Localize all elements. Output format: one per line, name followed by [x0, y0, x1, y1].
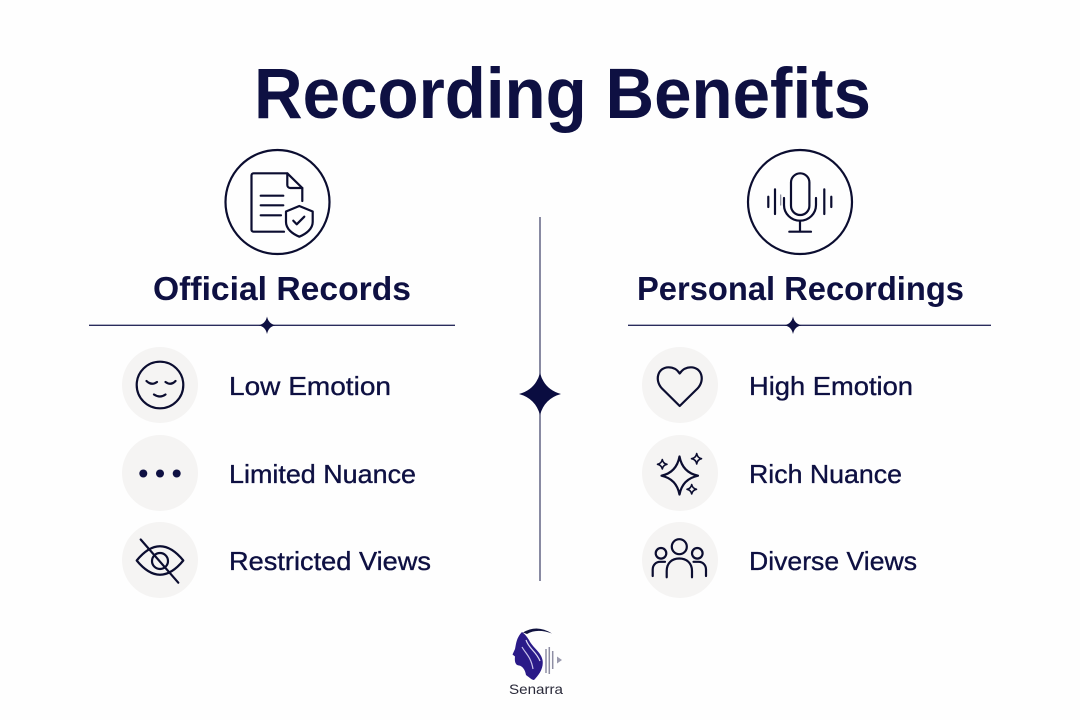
icon: sparkles	[658, 454, 702, 494]
divider: left	[89, 316, 455, 334]
row: high emotion	[642, 347, 913, 423]
row: limited nuance	[122, 435, 416, 511]
row: rich nuance: Rich Nuance	[749, 459, 902, 489]
row: restricted views: Restricted Views	[229, 546, 431, 576]
icon: three dots	[139, 470, 181, 478]
icon: calm face	[137, 362, 183, 408]
heading: official records: Official Records	[153, 270, 411, 307]
icon: document with shield	[226, 150, 330, 254]
row: restricted views	[122, 522, 431, 598]
row: diverse views: Diverse Views	[749, 546, 917, 576]
logo: senarra	[509, 628, 563, 697]
row: low emotion: Low Emotion	[229, 371, 391, 401]
icon: three people	[653, 539, 706, 577]
logo mark: head and sound wave	[512, 628, 562, 680]
center divider with star	[519, 217, 561, 581]
icon: crossed-out eye	[137, 540, 183, 583]
icon: heart	[658, 367, 702, 406]
divider: right	[628, 316, 991, 334]
row: rich nuance	[642, 435, 902, 511]
title: Recording Benefits	[254, 55, 871, 134]
row: limited nuance: Limited Nuance	[229, 459, 416, 489]
logo: senarra: Senarra	[509, 681, 563, 697]
heading: personal recordings: Personal Recordings	[637, 270, 964, 307]
row: high emotion: High Emotion	[749, 371, 913, 401]
row: diverse views	[642, 522, 917, 598]
row: low emotion	[122, 347, 391, 423]
icon: microphone	[748, 150, 852, 254]
